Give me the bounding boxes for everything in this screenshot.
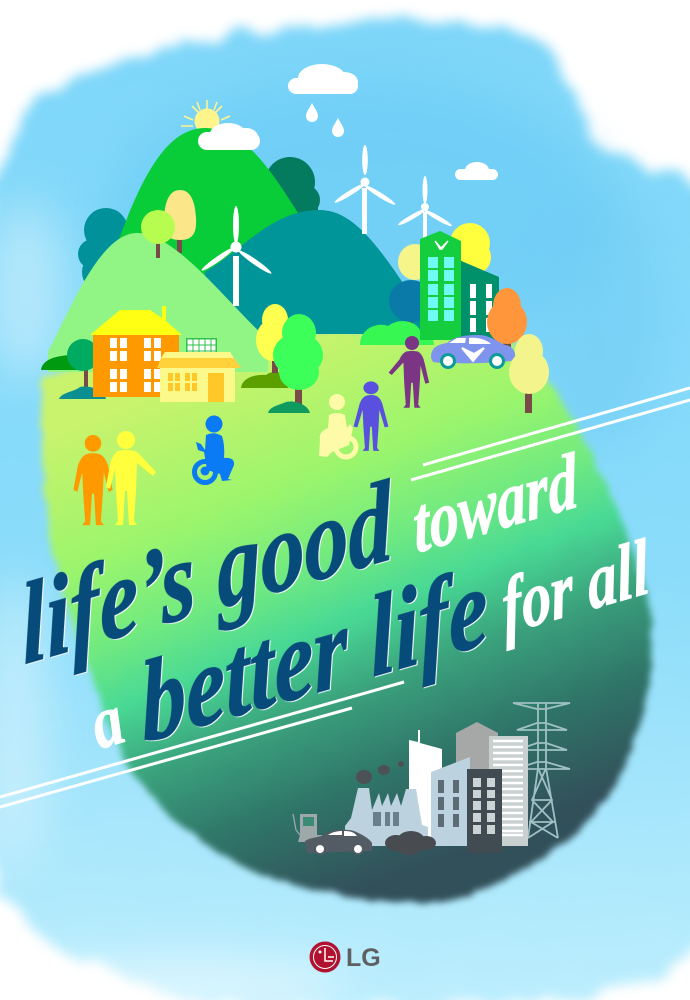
building: white — [409, 730, 442, 840]
building: grey — [456, 722, 498, 795]
LG logo — [310, 942, 381, 972]
bush: dark green — [265, 157, 320, 225]
factory — [345, 788, 428, 846]
tree: pale yellow behind building — [398, 244, 432, 280]
person: purple — [389, 336, 429, 408]
tree: orange — [487, 288, 527, 360]
tree: yellow — [256, 304, 290, 373]
wind turbine 2 — [333, 145, 397, 234]
rain drops — [306, 103, 344, 137]
people — [73, 336, 429, 525]
building: pale blue — [431, 757, 470, 846]
exhaust smog — [385, 831, 436, 855]
tree: lime round — [141, 210, 175, 258]
bush: olive — [241, 372, 288, 388]
power pylon — [513, 703, 570, 838]
building: dark green — [459, 260, 499, 342]
building: striped — [489, 736, 528, 846]
person: wheelchair blue — [194, 416, 234, 482]
solar panel — [186, 338, 217, 357]
bush: dark teal — [78, 208, 138, 292]
fuel pump — [293, 814, 322, 842]
text: toward: toward — [409, 437, 583, 571]
house: orange — [90, 306, 182, 397]
text: life's good: life’s good — [17, 457, 397, 689]
tree: yellow behind building — [450, 223, 491, 275]
mountain: bright green — [118, 128, 300, 290]
tree: pale orange — [164, 190, 196, 253]
polluted city — [293, 703, 570, 855]
bush: teal — [59, 387, 106, 399]
smoke puffs — [356, 761, 404, 784]
cloud: top — [288, 64, 358, 94]
scene: mountains and nature — [48, 64, 498, 372]
green city — [360, 223, 549, 413]
sun — [181, 100, 233, 134]
mountain: teal — [205, 210, 430, 334]
building: dark — [467, 769, 502, 853]
headline: life's good toward a better life for all — [17, 437, 653, 767]
bush: green left — [41, 355, 82, 370]
cloud: right — [455, 162, 498, 180]
person: orange — [73, 435, 113, 525]
person: indigo — [354, 381, 388, 451]
text: better life: better life — [137, 542, 492, 767]
wind turbine 3 — [397, 176, 453, 242]
bush: small teal green — [268, 402, 310, 413]
cloud: mountain — [198, 123, 260, 150]
person: wheelchair pale — [319, 394, 356, 457]
bush: bright green — [360, 321, 434, 345]
LG emblem — [310, 942, 340, 972]
building: green with V logo — [420, 231, 461, 340]
decorative lines top — [411, 388, 690, 480]
village — [41, 304, 323, 413]
tree: round green — [67, 339, 99, 389]
electric car — [431, 335, 515, 368]
gradient land blob — [41, 331, 652, 903]
LG wordmark: LG — [346, 944, 381, 972]
hill: light green — [48, 233, 268, 372]
decorative lines bottom — [0, 682, 404, 807]
grey car — [305, 830, 372, 854]
person: yellow — [106, 431, 156, 525]
wind turbine 1 — [200, 206, 273, 306]
tree: pale yellow right — [509, 334, 549, 413]
text: a: a — [81, 678, 133, 765]
tree: blue — [389, 280, 433, 334]
cottage with solar panel — [157, 338, 241, 402]
tree: bright green — [273, 314, 323, 406]
